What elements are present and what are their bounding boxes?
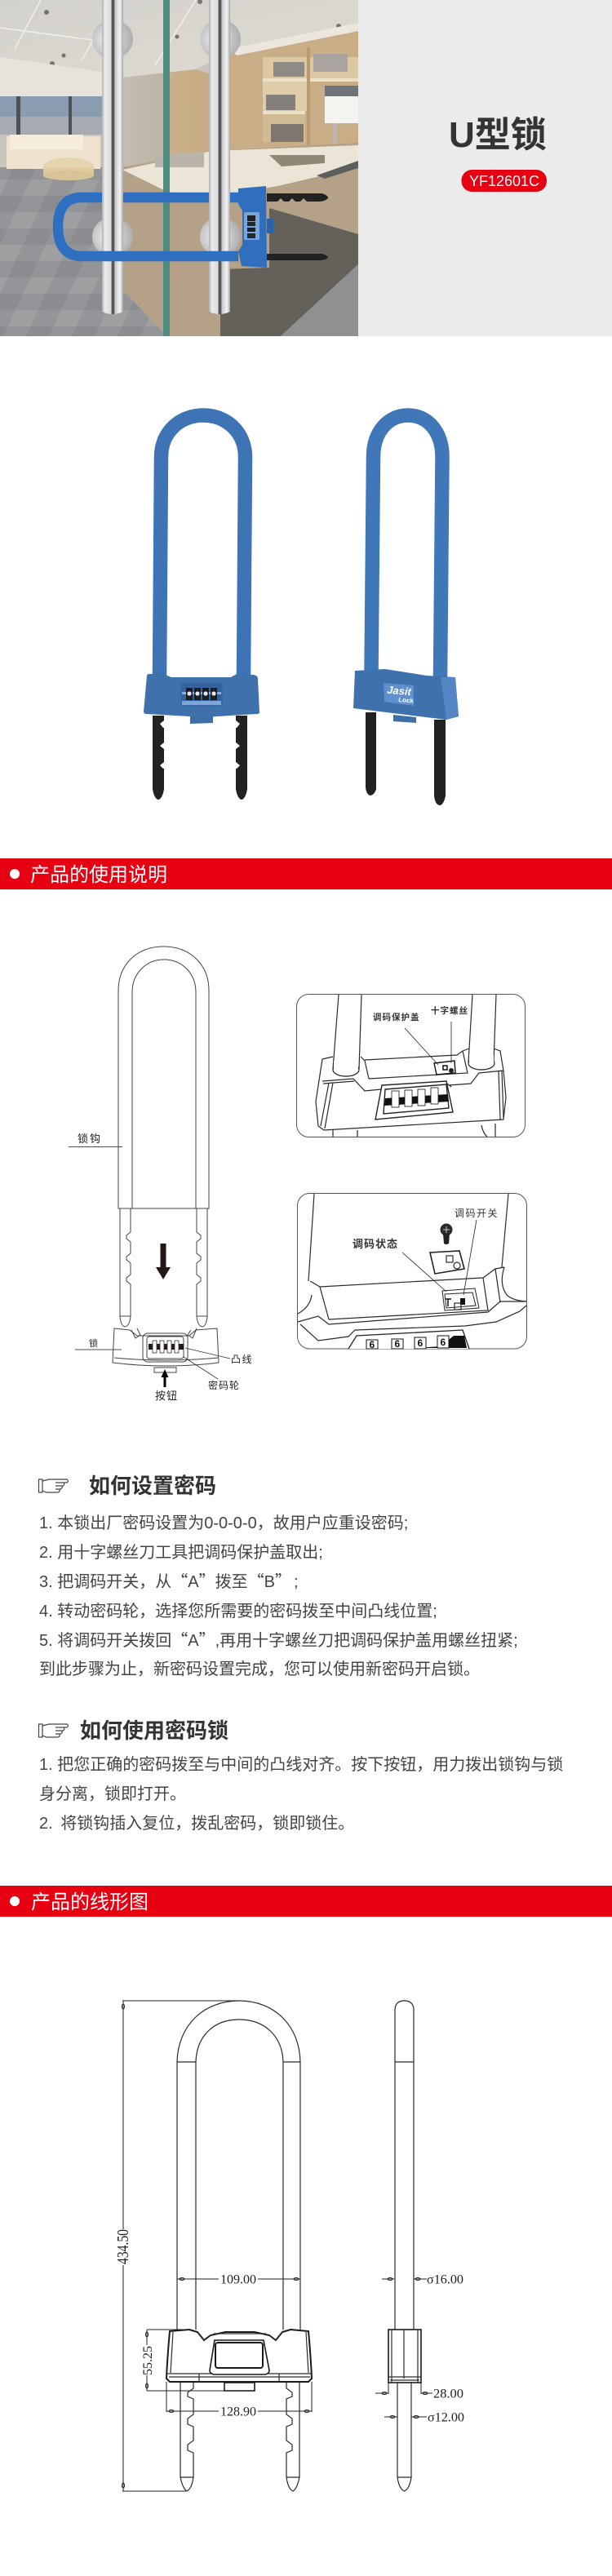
dimension: body depth [375,2383,463,2401]
label: cross screw: 十字螺丝 [431,1005,468,1016]
dimension: body height: 55.25 [141,2346,155,2375]
step list: 到此步骤为止，新密码设置完成，您可以使用新密码开启锁。 [39,1660,480,1678]
label: code switch [455,1208,499,1295]
dimension: prong diameter [384,2410,464,2425]
label: code state [353,1238,446,1292]
line drawing: full lock with labels [69,947,253,1402]
label: shackle: 锁钩 [78,1133,102,1145]
product photo: back view blue lock [353,415,459,805]
dimension: total height: 434.50 [114,2229,132,2264]
step list: 身分离，锁即打开。 [39,1785,186,1803]
brand logo: Jasit [387,684,412,698]
icon: pointing hand [39,1479,69,1492]
model badge: YF12601C [469,173,539,189]
dimension: total height [114,2001,239,2491]
label: code cover: 调码保护盖 [373,1012,419,1022]
dimension: body width [166,2382,312,2419]
label: code state: 调码状态 [353,1238,398,1250]
icon: pointing hand [39,1724,69,1737]
label: lock body: 锁 [89,1337,98,1349]
product photo: front view blue lock [144,415,259,800]
label: code cover [373,1012,438,1065]
label: code wheel: 密码轮 [208,1379,240,1391]
detail panel: code switch: 6 [441,1337,446,1348]
hero side panel [358,0,612,336]
step list: 1. 本锁出厂密码设置为0-0-0-0，故用户应重设密码; [39,1514,408,1532]
technical drawing: side view [375,2001,464,2491]
heading: 如何设置密码 [89,1474,216,1498]
section banner: usage: 产品的使用说明 [30,864,167,886]
dimension: shackle diameter [382,2273,463,2286]
section banner: line drawing [0,1886,612,1917]
label: raised line: 凸线 [231,1354,253,1365]
instructions: how to set the password [39,1474,518,1678]
detail panel: protective cover and screw [297,994,526,1137]
title: U型锁 [449,115,547,155]
dimension: body width: 128.90 [220,2405,256,2419]
dimension: body height [141,2330,253,2391]
step list: 5. 将调码开关拨回“A”,再用十字螺丝刀把调码保护盖用螺丝扭紧; [39,1627,518,1651]
step list [39,1514,518,1678]
dimension: body depth: 28.00 [433,2388,463,2401]
step list: 2. 将锁钩插入复位，拨乱密码，锁即锁住。 [39,1814,354,1833]
dimension: prong diameter: σ12.00 [428,2410,464,2425]
label: cross screw [431,1005,468,1063]
heading: 如何使用密码锁 [80,1718,228,1743]
detail panel: code switch: 6 [395,1338,400,1350]
step list: 2. 用十字螺丝刀工具把调码保护盖取出; [39,1543,323,1562]
detail panel: code switch [297,1193,527,1350]
dimension: shackle width [177,2273,300,2286]
hero photo: lock on glass door [0,0,358,336]
section banner: usage [0,858,612,889]
step list: 1. 把您正确的密码拨至与中间的凸线对齐。按下按钮，用力拨出锁钩与锁 [39,1755,563,1774]
label: code wheel [184,1357,240,1391]
switch recess [442,1288,479,1310]
hero section [0,0,612,336]
instructions: how to use the lock [39,1718,563,1833]
model badge [462,170,547,192]
detail panel: code switch: 6 [369,1339,375,1350]
section banner: line drawing: 产品的线形图 [31,1891,149,1913]
blue U-lock in photo [58,186,328,268]
label: shackle [69,1133,122,1147]
brand logo: Lock [398,696,415,705]
arrow: insert shackle [156,1244,171,1279]
arrow: press button [162,1369,168,1387]
dimension: shackle diameter: σ16.00 [427,2273,463,2286]
door handles [58,0,241,314]
step list: 3. 把调码开关，从“A”拨至“B”; [39,1568,299,1592]
dimension: shackle width: 109.00 [220,2273,256,2286]
step list [39,1755,563,1833]
label: raised line [185,1348,253,1365]
detail panel: code switch: 6 [418,1337,423,1349]
label: button: 按钮 [155,1390,178,1402]
label: code switch: 调码开关 [455,1208,499,1219]
technical drawing: front view [114,2001,312,2491]
icon: removed cover [430,1251,464,1274]
step list: 4. 转动密码轮，选择您所需要的密码拨至中间凸线位置; [39,1602,437,1621]
icon: screw [441,1224,452,1244]
label: lock body [75,1337,122,1350]
brand logo [386,684,415,705]
